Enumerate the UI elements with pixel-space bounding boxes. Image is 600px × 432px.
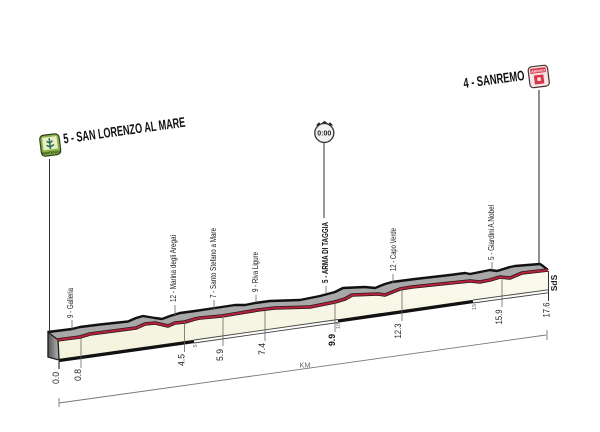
distance 12.3: 12.3 [393, 324, 403, 338]
left side face [48, 332, 59, 360]
distance 0.8: 0.8 [73, 369, 83, 381]
km markers [193, 304, 478, 348]
icon: finish sign: ARRIVO [531, 68, 545, 74]
finish title: 4 - SANREMO [462, 67, 525, 91]
distance 17.6: 17.6 [542, 302, 552, 318]
finish pole [538, 90, 540, 265]
km unit label: KM [300, 360, 310, 370]
distance 9.9: 9.9 [327, 334, 337, 346]
elevation profile [48, 264, 548, 360]
marker 5: 5 [193, 344, 199, 348]
distance 5.9: 5.9 [215, 349, 225, 361]
icon: start sign [39, 133, 61, 157]
profile top line [48, 264, 548, 332]
kilometre scale bar [59, 290, 548, 360]
label: Giardini A.Nobel: 5 - Giardini A.Nobel [486, 205, 496, 260]
distance labels [51, 302, 552, 384]
place labels [65, 205, 496, 318]
label: Santo Stefano a Mare: 7 - Santo Stefano a Mare [208, 228, 218, 298]
label: Galleria: 9 - Galleria [65, 288, 75, 318]
icon: stopwatch: 0:00 [317, 129, 331, 138]
start pole [48, 159, 50, 332]
red road line [57, 270, 548, 340]
marker 10: 10 [336, 323, 342, 329]
distance 7.4: 7.4 [257, 343, 267, 355]
SdS mark: SdS [549, 274, 559, 291]
label: Riva Ligure: 9 - Riva Ligure [250, 252, 260, 292]
start title: 5 - SAN LORENZO AL MARE [62, 114, 186, 146]
road surface band [48, 264, 548, 340]
label: Arma di Taggia: 5 - ARMA DI TAGGIA [320, 222, 330, 283]
distance 0.0: 0.0 [51, 372, 61, 384]
icon: stopwatch [315, 122, 334, 142]
place ticks [72, 262, 492, 329]
label: Marina degli Aregai: 12 - Marina degli Aregai [168, 235, 178, 302]
distance 15.9: 15.9 [494, 310, 504, 324]
label: Capo Verde: 12 - Capo Verde [388, 228, 398, 271]
icon: finish sign [528, 65, 550, 88]
clock pole [323, 143, 325, 218]
distance ticks [59, 271, 548, 369]
marker 15: 15 [472, 304, 478, 310]
distance 4.5: 4.5 [176, 354, 186, 366]
icon: start sign: PARTENZA [42, 150, 61, 156]
cream profile body [57, 270, 548, 360]
total distance bar [59, 330, 547, 407]
